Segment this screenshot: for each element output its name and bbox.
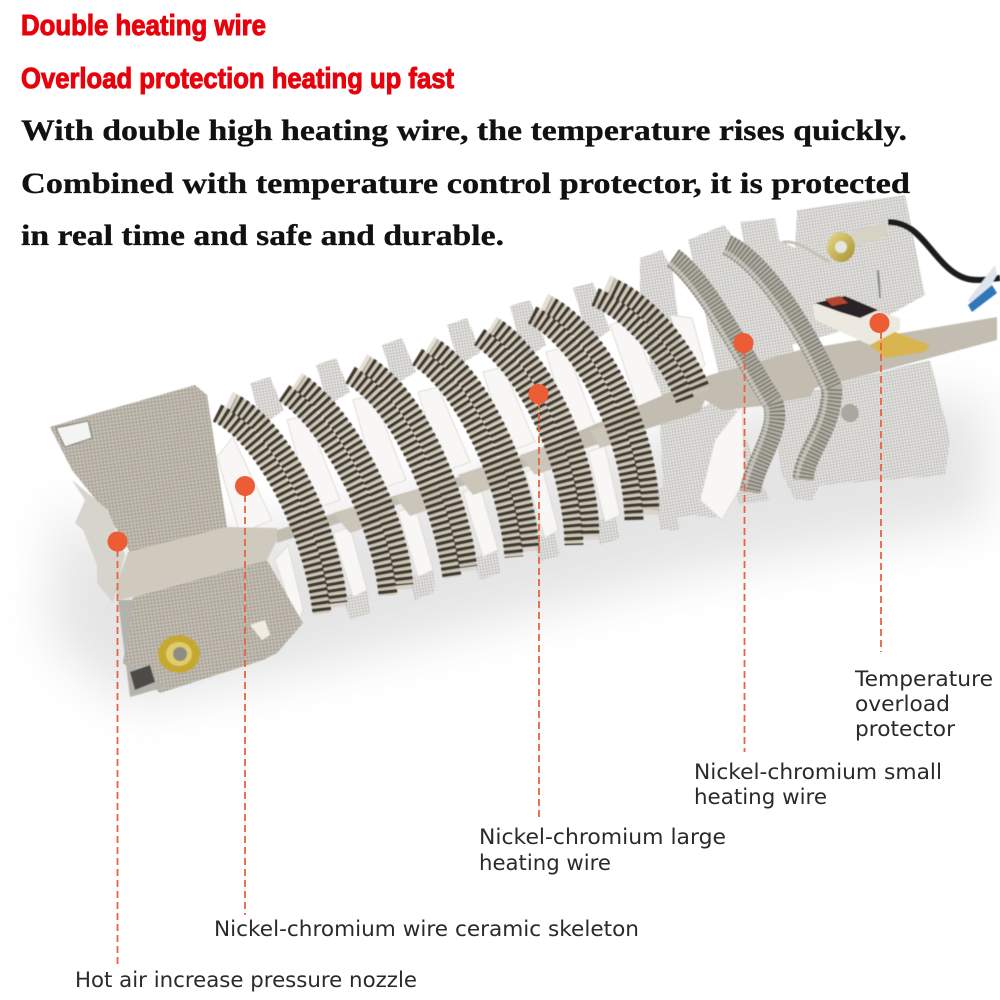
large heating coils xyxy=(217,287,701,613)
callout: temperature protector xyxy=(854,313,993,741)
description text xyxy=(21,114,910,252)
lower ceramic blocks xyxy=(275,545,303,625)
bent silver band xyxy=(115,527,277,600)
callout: small heating wire xyxy=(694,333,942,809)
lower left textured plate xyxy=(123,560,303,693)
left upper textured plate xyxy=(50,385,227,552)
left curved side wall xyxy=(72,480,125,603)
black wire xyxy=(888,222,1000,280)
callout: ceramic skeleton xyxy=(214,476,639,941)
temperature protector xyxy=(812,270,930,358)
callout: large heating wire xyxy=(479,384,726,875)
callout: small heating wire: heating wire xyxy=(694,785,827,809)
small heating coils xyxy=(668,245,832,492)
ceramic skeleton xyxy=(217,315,745,625)
lower bottom brass eyelet xyxy=(158,635,200,673)
red heading: Overload protection heating up fast xyxy=(21,63,454,95)
plate centre panel xyxy=(660,395,770,520)
heating element product photo xyxy=(50,195,1000,697)
callout: temperature protector: overload xyxy=(855,692,950,716)
description text: Combined with temperature control protector, it is protected xyxy=(21,167,910,200)
callout: ceramic skeleton: Nickel-chromium wire ceramic skeleton xyxy=(214,917,639,941)
left window cut-out xyxy=(56,421,92,447)
red heading: Double heating wire xyxy=(21,10,266,42)
callout: temperature protector: Temperature xyxy=(854,667,993,691)
lower tabs xyxy=(343,485,680,620)
callout: hot air nozzle: Hot air increase pressure nozzle xyxy=(75,968,417,992)
description text: in real time and safe and durable. xyxy=(21,219,504,252)
top brass eyelet and lug xyxy=(783,222,888,262)
callout: small heating wire: Nickel-chromium small xyxy=(694,760,942,784)
lower right plate xyxy=(775,360,950,500)
upper ceramic blocks xyxy=(217,437,272,533)
callout: temperature protector: protector xyxy=(855,717,955,741)
notch in lower plate xyxy=(250,620,270,640)
rivet hole in lower right plate xyxy=(841,404,859,422)
shelf lower tab teeth xyxy=(333,422,620,533)
shelf band across coils xyxy=(277,317,997,543)
chrome corner xyxy=(118,600,165,697)
upper right plate xyxy=(740,195,925,345)
callout: large heating wire: Nickel-chromium large xyxy=(479,825,726,849)
rear upper tabs xyxy=(250,225,800,425)
callout: large heating wire: heating wire xyxy=(479,851,611,875)
description text: With double high heating wire, the temperature rises quickly. xyxy=(21,114,907,147)
callout: hot air nozzle xyxy=(75,532,417,992)
red heading xyxy=(21,10,454,95)
blue wires xyxy=(968,265,997,312)
object shadow xyxy=(50,400,985,705)
